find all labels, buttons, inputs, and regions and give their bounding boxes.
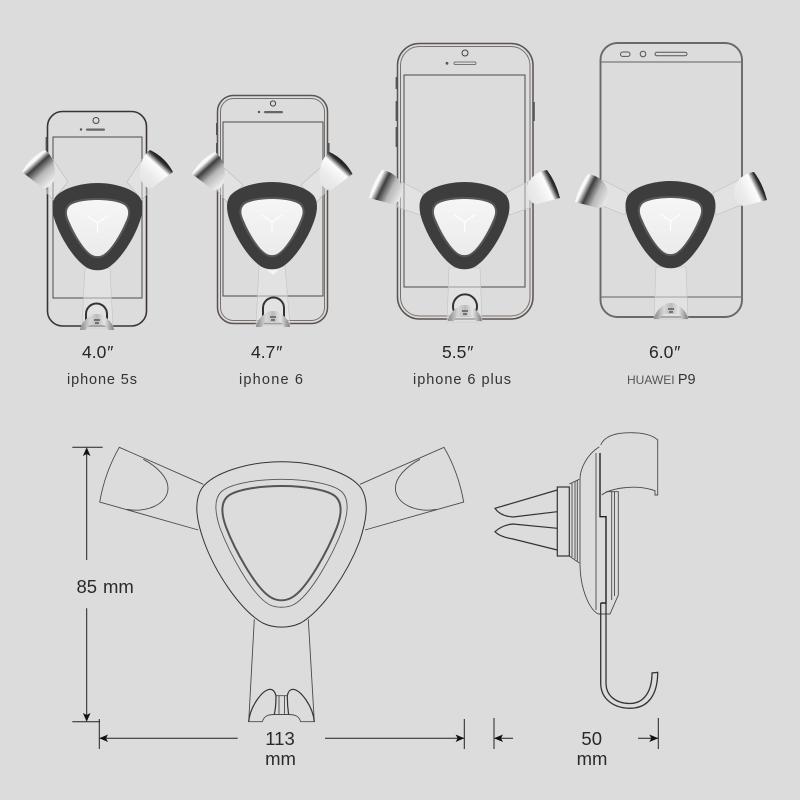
phone group: iphone 6 xyxy=(192,96,352,388)
holder xyxy=(369,170,560,322)
phone group: Huawei P9 xyxy=(575,43,767,388)
holder xyxy=(22,150,173,330)
phone group: iphone 5s xyxy=(22,112,173,388)
stem and clip xyxy=(249,619,314,722)
phone outline xyxy=(396,44,535,319)
body and vent clips xyxy=(495,447,618,614)
size label: 6.0″ xyxy=(649,342,680,362)
dimension: depth 50 mm xyxy=(494,718,658,769)
dimension: height 85 mm: mm xyxy=(103,576,134,597)
holder xyxy=(575,172,767,319)
model label: iphone 5s xyxy=(67,372,137,388)
phone group: iphone 6 plus xyxy=(369,44,560,388)
lower hook xyxy=(601,603,658,708)
size label: 5.5″ xyxy=(442,342,473,362)
dimension: width 113 mm: mm xyxy=(265,748,296,769)
phone outline xyxy=(600,43,742,317)
dimension: depth 50 mm: 50 xyxy=(581,728,602,749)
right arm xyxy=(360,447,464,530)
dimension: height 85 mm: 85 xyxy=(76,576,97,597)
phone outline xyxy=(216,96,330,324)
dimension: depth 50 mm: mm xyxy=(577,748,607,769)
model label: HUAWEI P9 xyxy=(627,372,696,388)
dimension: width 113 mm xyxy=(99,719,464,769)
top hook cap xyxy=(601,433,658,495)
size label: 4.0″ xyxy=(82,342,113,362)
model label: iphone 6 plus xyxy=(413,372,511,388)
phone outline xyxy=(46,112,146,326)
technical drawing: side view xyxy=(495,433,658,708)
size label: 4.7″ xyxy=(251,342,282,362)
dimension: width 113 mm: 113 xyxy=(265,728,295,749)
left arm xyxy=(100,447,203,530)
holder xyxy=(192,152,352,327)
model label: iphone 6 xyxy=(239,372,303,388)
technical drawing: front view xyxy=(100,447,464,722)
dimension: height 85 mm xyxy=(72,447,134,722)
triangular body outline xyxy=(197,462,366,627)
